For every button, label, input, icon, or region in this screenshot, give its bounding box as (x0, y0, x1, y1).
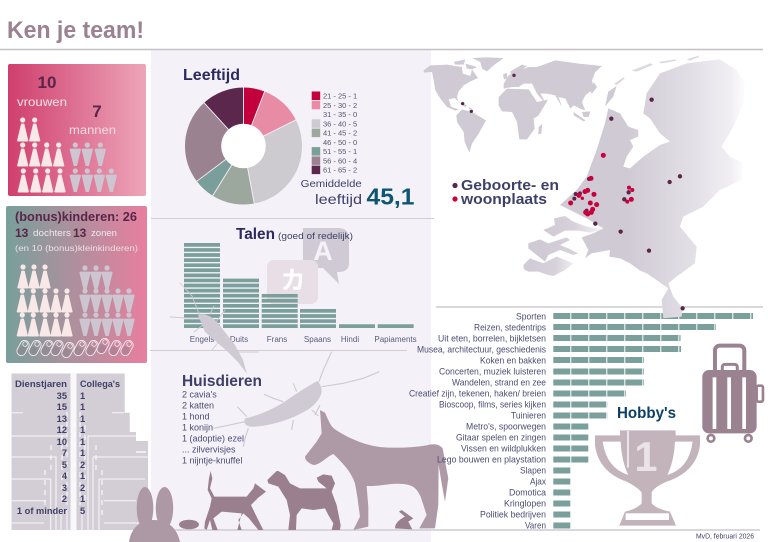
callout: gemiddelde leeftijd: leeftijd (315, 191, 362, 207)
axis labels: talen: Frans (267, 335, 287, 344)
table values: dienstjaren: 3 (62, 483, 67, 493)
table values: collega's: 1 (80, 471, 85, 481)
panel: centre background (151, 50, 431, 542)
panel: dienstjaren table (11, 373, 148, 531)
map dots: geboorteplaats (461, 74, 685, 310)
bar: Hindi (339, 324, 375, 328)
text: huisdieren list: 1 nijntje-knuffel (182, 456, 242, 466)
axis labels: talen (190, 335, 417, 344)
icon: vertaal ballonnen: A (313, 236, 333, 266)
table header: Dienstjaren (15, 379, 67, 389)
callout: gemiddelde leeftijd: 45,1 (366, 184, 415, 210)
heading: talen: Talen (236, 226, 275, 243)
callout: gemiddelde leeftijd: Gemiddelde (301, 178, 362, 190)
chart labels: hobby's: Reizen, stedentrips (474, 322, 546, 334)
chart labels: hobby's: Vissen en wildplukken (461, 444, 546, 454)
chart labels: hobby's: Bioscoop, films, series kijken (439, 400, 546, 410)
axis labels: talen: Hindi (341, 335, 359, 344)
chart labels: hobby's: Musea, architectuur, geschiedenis (417, 344, 546, 356)
icon: cavia (179, 520, 199, 529)
axis labels: talen: Duits (230, 335, 248, 344)
chart labels: hobby's (409, 312, 547, 532)
chart labels: hobby's: Slapen (520, 466, 546, 476)
legend: geboorte- en woonplaats: Geboorte- en (461, 178, 559, 194)
table values: dienstjaren: 7 (62, 448, 67, 458)
map dots: woonplaats (568, 153, 634, 216)
chart: hobby bars (553, 316, 753, 526)
icons: mannen (70, 142, 117, 192)
table values: dienstjaren: 4 (62, 471, 68, 481)
icon: konijn (395, 510, 413, 529)
bar: Duits (223, 278, 259, 328)
table values: dienstjaren (17, 391, 68, 516)
chart labels: hobby's: Creatief zijn, tekenen, haken/ breien (409, 388, 546, 400)
chart labels: hobby's: Uit eten, borrelen, bijkletsen (438, 334, 546, 344)
icon: trofee: 1 (634, 433, 658, 480)
chart labels: hobby's: Tuinieren (511, 410, 546, 422)
icon: hond (267, 471, 341, 530)
legend: leeftijd (312, 92, 357, 175)
icons: zonen (79, 265, 135, 336)
chart labels: hobby's: Domotica (509, 488, 547, 498)
icons: kleinkinderen (15, 337, 135, 359)
legend: leeftijd: 25 - 30 - 2 (323, 101, 357, 110)
label: vrouwen: vrouwen (17, 95, 67, 109)
table values: dienstjaren: 35 (57, 391, 67, 401)
footer credit: MvD, februari 2026 (696, 534, 754, 540)
panel: bonuskinderen (6, 206, 147, 363)
text: huisdieren list: 2 cavia's (182, 390, 217, 400)
chart: leeftijd donut (196, 87, 296, 204)
legend: geboorte- en woonplaats: woonplaats (460, 192, 547, 208)
table header (15, 379, 120, 389)
icons: vrouwen (17, 117, 66, 192)
icon: koffer (702, 346, 763, 442)
icons: dochters (17, 264, 73, 336)
chart: talen (190, 243, 417, 344)
legend: leeftijd: 46 - 50 - 0 (323, 138, 357, 147)
legend: leeftijd: 21 - 25 - 1 (323, 92, 357, 100)
heading: leeftijd: Leeftijd (183, 67, 240, 84)
table values: collega's (80, 391, 85, 516)
table values: dienstjaren: 1 of minder (17, 506, 67, 516)
icon: trofee (595, 430, 700, 526)
legend: leeftijd: 61 - 65 - 2 (323, 166, 357, 175)
icon: klein zilvervisje (170, 283, 258, 374)
chart labels: hobby's: Wandelen, strand en zee (452, 378, 546, 388)
count: 10 vrouwen: 10 (38, 73, 56, 92)
bar: Papiaments (378, 324, 414, 328)
text: huisdieren list: 1 (adoptie) ezel (182, 434, 244, 444)
chart labels: hobby's: Varen (525, 520, 546, 532)
text: dochters en zonen (15, 226, 117, 240)
icon: vertaal ballonnen: カ (280, 267, 306, 295)
heading: hobby's: Hobby's (617, 405, 676, 422)
heading: talen: (goed of redelijk) (278, 231, 353, 242)
table values: collega's: 1 (80, 402, 85, 412)
table values: collega's: 1 (80, 437, 85, 447)
heading: kinderen: (bonus)kinderen: 26 (15, 210, 137, 224)
count: 7 mannen: 7 (92, 102, 102, 121)
table values: collega's: 1 (80, 448, 85, 458)
icon: groot zilvervisje (213, 352, 379, 447)
text: dochters en zonen: dochters (33, 228, 71, 239)
chart labels: hobby's: Kringlopen (504, 498, 546, 510)
axis labels: talen: Papiaments (374, 335, 417, 344)
text: huisdieren list (182, 390, 244, 466)
table values: collega's: 5 (80, 506, 85, 516)
heading: talen (236, 226, 353, 243)
bar: Engels (184, 243, 220, 328)
table values: dienstjaren: 10 (57, 437, 67, 447)
text: kleinkinderen: (en 10 (bonus)kleinkinderen) (15, 243, 138, 253)
chart labels: hobby's: Sporten (516, 312, 546, 322)
table values: dienstjaren: 2 (62, 494, 67, 504)
table values: collega's: 1 (80, 425, 85, 435)
map: Nederland (461, 55, 745, 318)
bar: Spaans (300, 309, 336, 328)
panel: vrouwen en mannen (8, 64, 146, 196)
table values: dienstjaren: 12 (57, 425, 67, 435)
table header: Collega's (80, 379, 120, 389)
callout: gemiddelde leeftijd (301, 178, 415, 210)
table values: collega's: 1 (80, 494, 85, 504)
icon: nijntje (129, 487, 180, 542)
bar: Frans (262, 294, 298, 328)
icon: kat (204, 471, 266, 530)
chart labels: hobby's: Gitaar spelen en zingen (456, 432, 546, 444)
chart labels: hobby's: Metro's, spoorwegen (466, 422, 546, 432)
icon: vertaal ballonnen (267, 228, 349, 304)
legend: leeftijd: 51 - 55 - 1 (323, 147, 357, 156)
legend: leeftijd: 36 - 40 - 5 (323, 119, 357, 128)
table values: collega's: 2 (80, 483, 85, 493)
chart labels: hobby's: Lego bouwen en playstation (437, 454, 546, 466)
text: dochters en zonen: 13 (73, 226, 87, 240)
legend: leeftijd: 56 - 60 - 4 (323, 156, 357, 165)
text: huisdieren list: 1 hond (182, 412, 210, 422)
legend: leeftijd: 41 - 45 - 2 (323, 129, 357, 138)
table values: collega's: 1 (80, 414, 85, 424)
chart labels: hobby's: Koken en bakken (480, 356, 546, 366)
icon: ezel (305, 410, 448, 530)
text: huisdieren list: ... zilvervisjes (182, 444, 236, 454)
table values: dienstjaren: 15 (57, 402, 67, 412)
legend: leeftijd: 31 - 35 - 0 (323, 110, 357, 119)
table values: dienstjaren: 13 (57, 414, 67, 424)
chart labels: hobby's: Ajax (530, 476, 546, 488)
table values: collega's: 1 (80, 391, 85, 401)
table values: collega's: 2 (80, 460, 85, 470)
chart labels: hobby's: Politiek bedrijven (480, 510, 546, 520)
text: huisdieren list: 1 konijn (182, 422, 213, 432)
table values: dienstjaren: 5 (62, 460, 67, 470)
title: Ken je team! (7, 17, 144, 44)
axis labels: talen: Spaans (304, 335, 331, 344)
text: huisdieren list: 2 katten (182, 400, 214, 410)
heading: huisdieren: Huisdieren (182, 373, 262, 390)
legend: geboorte- en woonplaats (452, 178, 559, 208)
text: dochters en zonen: 13 (15, 226, 29, 240)
chart labels: hobby's: Concerten, muziek luisteren (439, 366, 546, 378)
map: wereldkaart (424, 57, 602, 153)
text: dochters en zonen: zonen (91, 228, 117, 239)
label: mannen: mannen (69, 123, 116, 137)
axis labels: talen: Engels (190, 335, 214, 344)
